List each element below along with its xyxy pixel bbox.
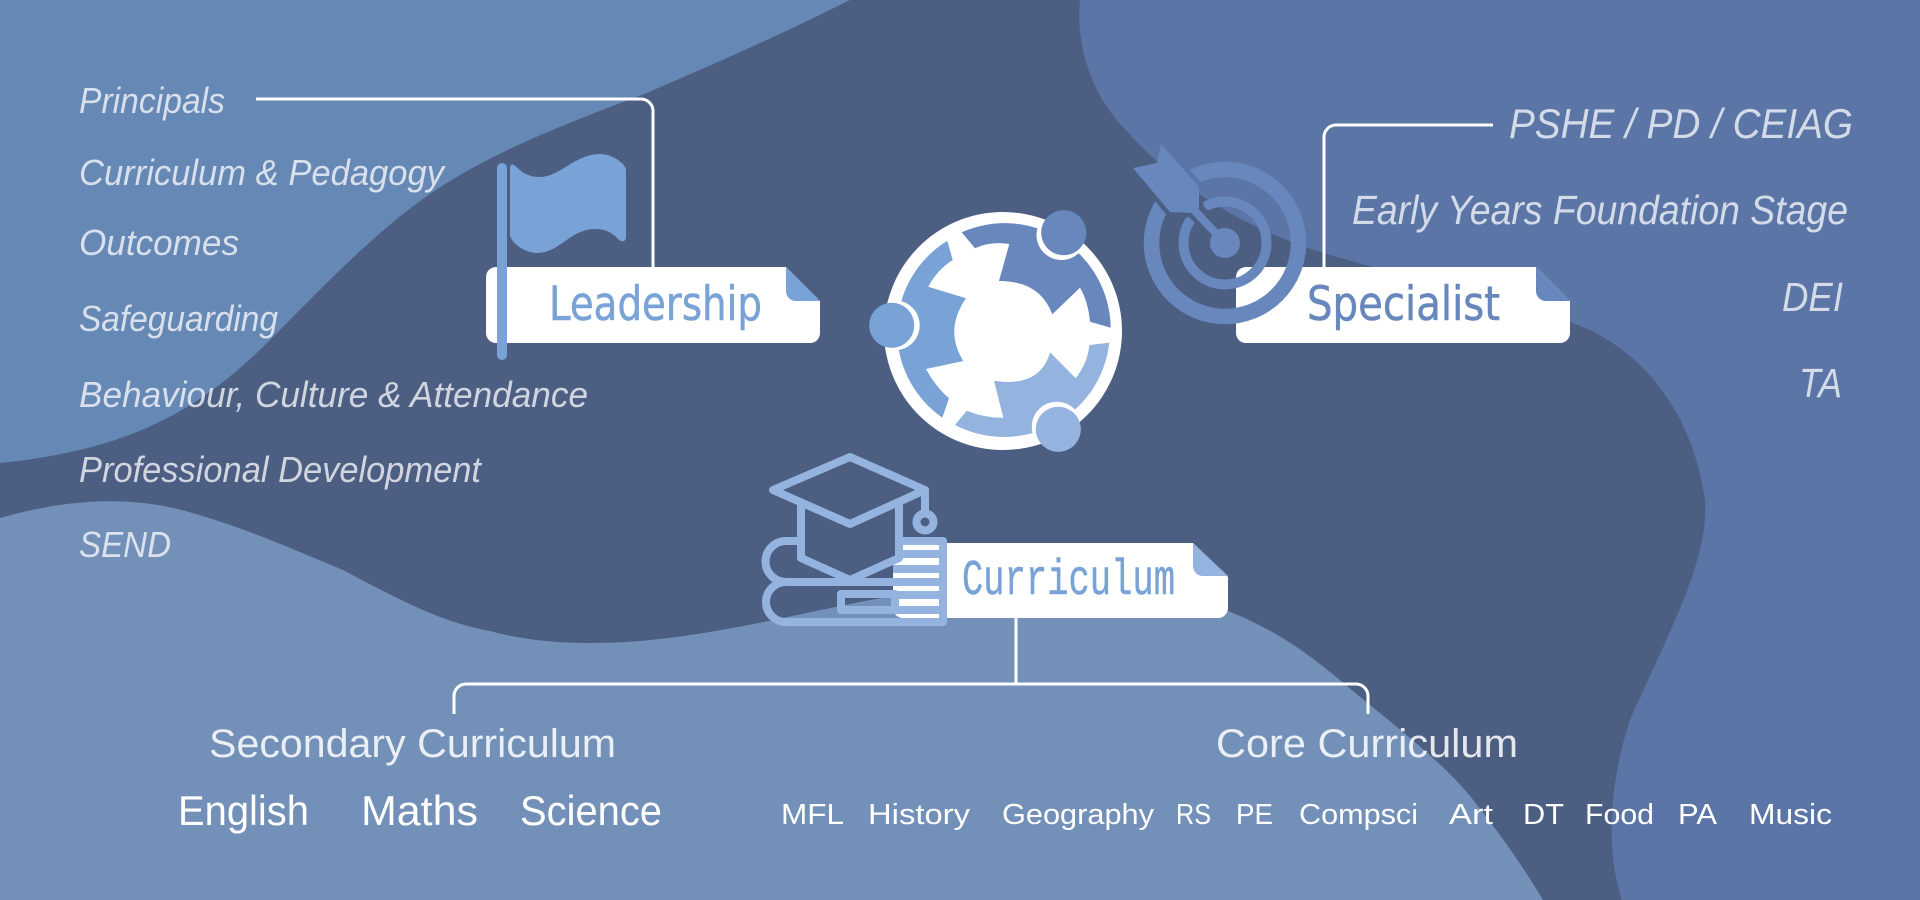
subjects: secondary: Science [520, 787, 662, 834]
right list: specialist roles [1352, 100, 1853, 406]
curriculum label [893, 543, 1228, 618]
subjects: core: Food [1585, 799, 1654, 831]
node: left [869, 300, 920, 350]
subjects: core: Compsci [1299, 799, 1418, 831]
subjects: core: MFL [781, 799, 844, 831]
subjects: core [781, 799, 1832, 831]
right list: specialist roles: Early Years Foundation Stage [1352, 187, 1848, 233]
connector: curriculum branches [454, 618, 1368, 714]
node: top right [1036, 210, 1086, 260]
left list: leadership roles: SEND [79, 524, 171, 565]
subjects: core: Geography [1002, 799, 1155, 831]
heading: secondary curriculum: Secondary Curriculum [209, 722, 616, 766]
left list: leadership roles: Curriculum & Pedagogy [79, 152, 446, 193]
heading: core curriculum: Core Curriculum [1216, 722, 1518, 766]
subjects: secondary: English [178, 787, 309, 834]
right list: specialist roles: DEI [1782, 274, 1843, 320]
connector: PSHE to specialist [1324, 125, 1493, 267]
subjects: secondary [178, 787, 662, 834]
subjects: core: RS [1176, 799, 1211, 831]
icon: target with arrow [1133, 144, 1298, 316]
left list: leadership roles: Safeguarding [79, 298, 278, 339]
curriculum label: Curriculum [962, 553, 1175, 610]
left list: leadership roles [79, 80, 588, 565]
specialist label: Specialist [1307, 277, 1500, 332]
leadership label [486, 267, 820, 343]
icon: central gear wheel [869, 210, 1122, 452]
blob: top right [1079, 0, 1920, 900]
left list: leadership roles: Principals [79, 80, 225, 121]
icon: flag [497, 154, 626, 360]
subjects: core: PE [1236, 799, 1273, 831]
subjects: secondary: Maths [361, 787, 478, 834]
right list: specialist roles: PSHE / PD / CEIAG [1509, 100, 1853, 147]
left list: leadership roles: Behaviour, Culture & Attendance [79, 374, 588, 415]
blob: top left [0, 0, 850, 463]
subjects: core: Music [1749, 799, 1832, 831]
subjects: core: PA [1678, 799, 1718, 831]
subjects: core: DT [1523, 799, 1564, 831]
left list: leadership roles: Outcomes [79, 222, 239, 263]
icon: graduation cap and books [765, 457, 943, 622]
leadership label: Leadership [549, 277, 762, 332]
specialist label [1236, 267, 1570, 343]
right list: specialist roles: TA [1799, 360, 1842, 406]
subjects: core: Art [1449, 799, 1493, 831]
left list: leadership roles: Professional Development [79, 449, 483, 490]
connector: principals to leadership [256, 99, 653, 267]
node: bottom [1032, 402, 1082, 452]
subjects: core: History [868, 799, 971, 831]
blob: bottom [0, 501, 1543, 900]
